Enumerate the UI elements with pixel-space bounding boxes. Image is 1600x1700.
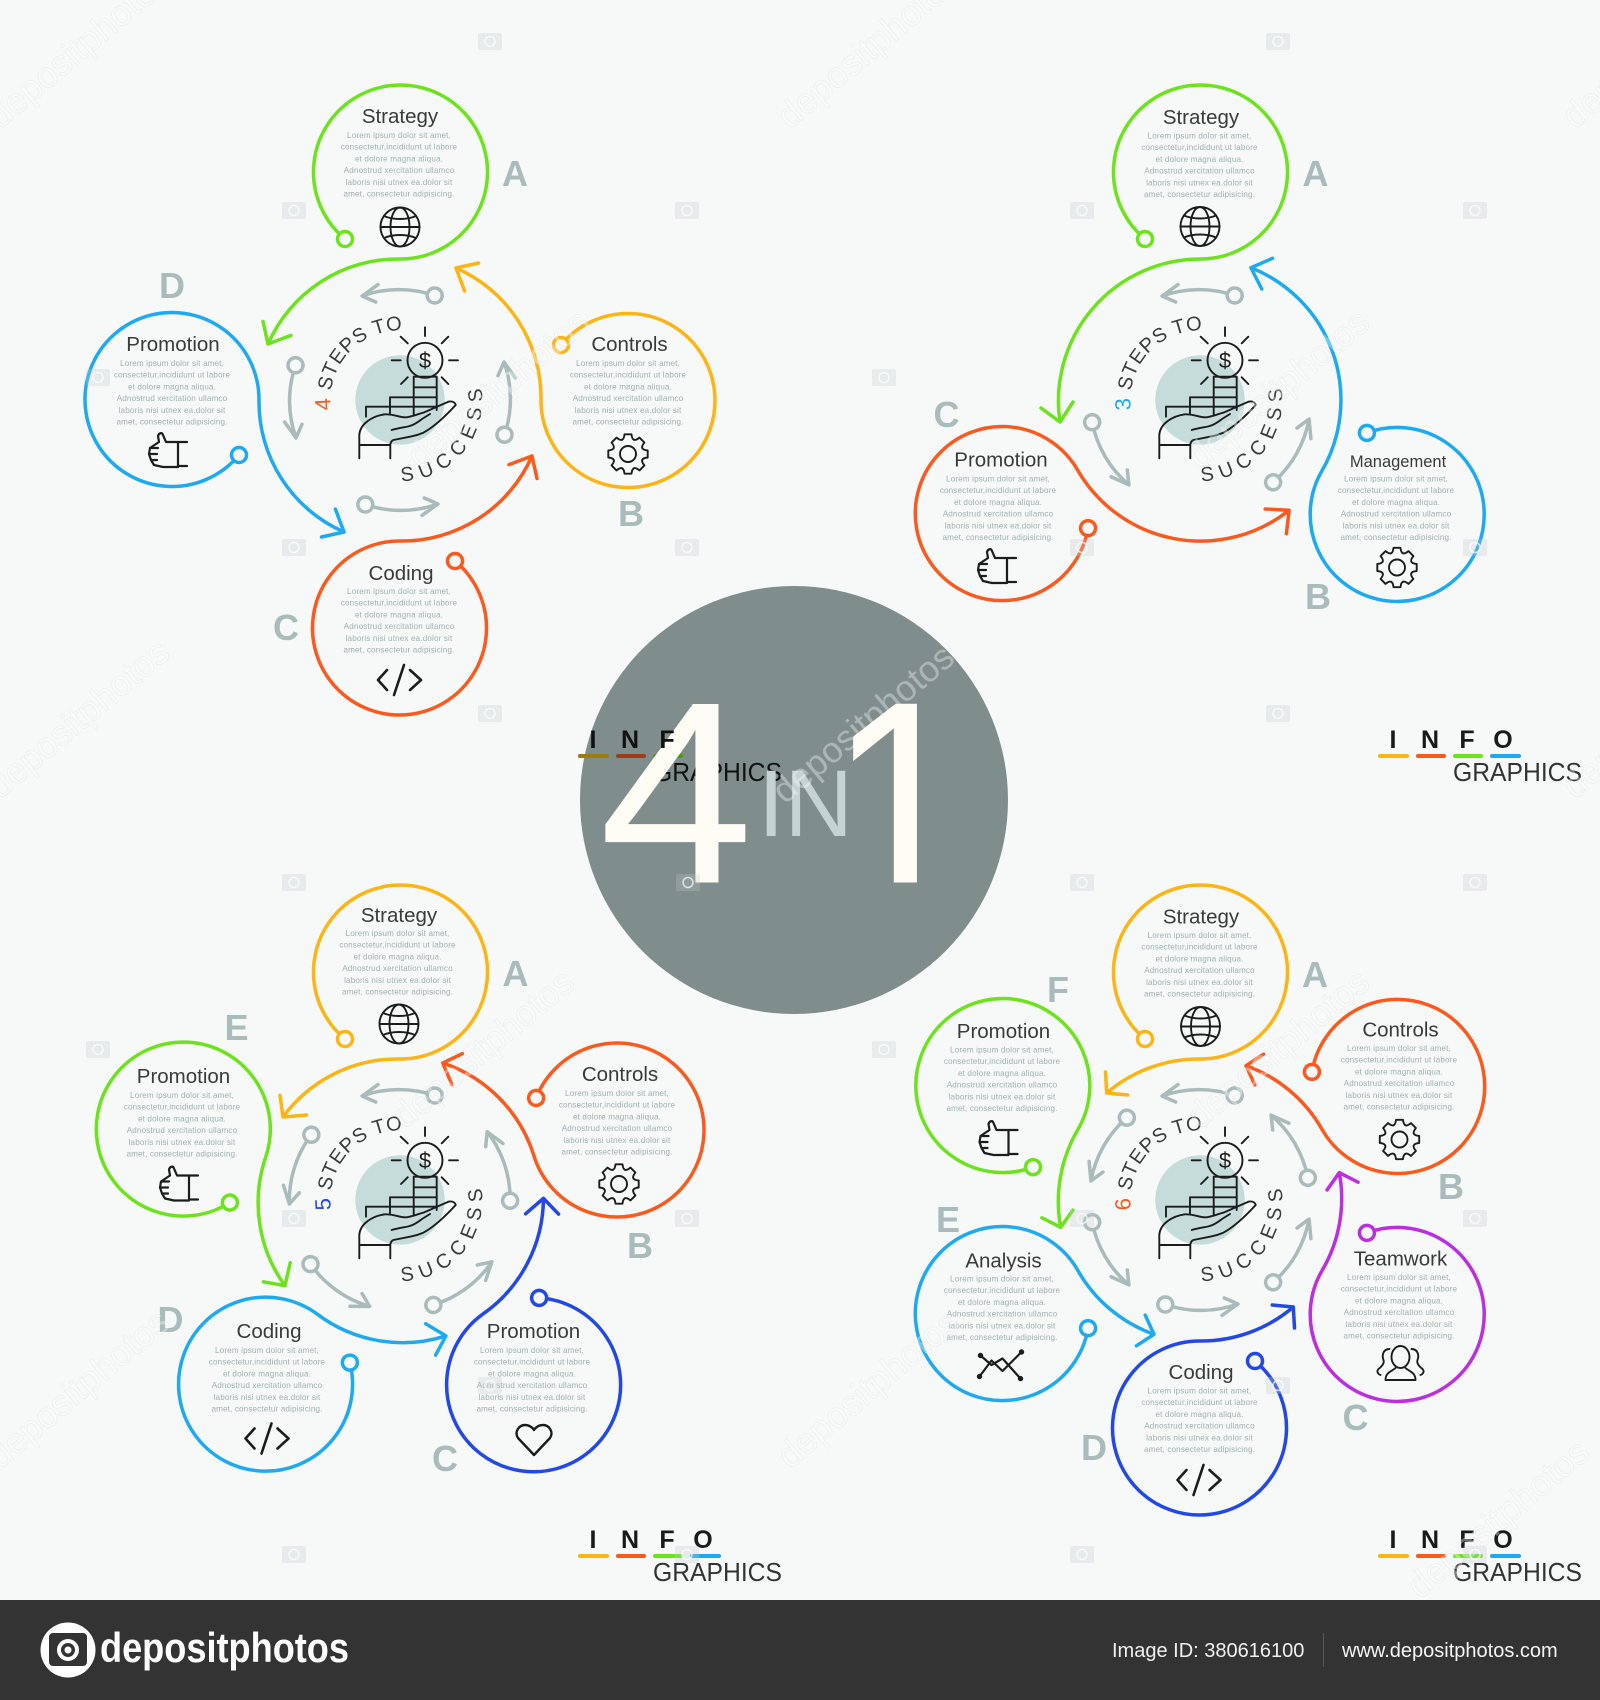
centre: arrows and hand icon xyxy=(1082,1082,1318,1318)
step C text: Lorem ipsum dolor sit amet, xyxy=(480,1346,584,1355)
connector C orange xyxy=(883,313,1299,695)
connector C purple xyxy=(1247,1171,1520,1433)
step F text: consectetur,incididunt ut labore xyxy=(944,1057,1061,1066)
letter B: B xyxy=(1438,1166,1464,1207)
step E text xyxy=(124,1065,241,1158)
step A text: amet, consectetur adipisicing. xyxy=(1144,990,1255,998)
step A text: Strategy xyxy=(361,904,438,927)
step A text: Adnostrud xercitation ullamco xyxy=(344,166,455,175)
connector B yellow xyxy=(456,263,715,487)
step B text: consectetur,incididunt ut labore xyxy=(1338,486,1455,495)
step E text: et dolore magna aliqua. xyxy=(138,1114,226,1123)
step B text xyxy=(570,333,687,426)
step D text: Lorem ipsum dolor sit amet, xyxy=(120,359,224,368)
logo underlay: bars and graphics under the 4: GRAPHICS xyxy=(653,757,782,787)
icon: gear xyxy=(599,1164,639,1204)
step A text: consectetur,incididunt ut labore xyxy=(341,143,458,152)
step B text: Adnostrud xercitation ullamco xyxy=(1344,1079,1455,1088)
step D text: Lorem ipsum dolor sit amet, xyxy=(1148,1386,1251,1396)
connector E light blue xyxy=(883,1177,1156,1439)
icon: team xyxy=(1377,1346,1424,1380)
panel: 4 steps to success xyxy=(83,83,717,726)
step A text xyxy=(339,904,456,996)
connector D light blue xyxy=(144,1216,448,1525)
stock watermarks: depositphotos xyxy=(399,301,597,476)
step D text: consectetur,incididunt ut labore xyxy=(114,371,231,380)
step E text: Adnostrud xercitation ullamco xyxy=(127,1126,238,1135)
letter D: D xyxy=(158,1299,184,1340)
centre: arrows and hand icon xyxy=(282,1082,520,1314)
logo: info graphics top right: N xyxy=(1421,726,1439,754)
logo: info graphics bottom left: F xyxy=(659,1526,675,1554)
step A text: consectetur,incididunt ut labore xyxy=(339,941,456,950)
step C text: Coding xyxy=(369,562,433,585)
step D text: laboris nisi utnex ea.dolor sit xyxy=(1146,1433,1253,1442)
step C text: Adnostrud xercitation ullamco xyxy=(943,510,1054,519)
step D text: et dolore magna aliqua. xyxy=(128,382,216,391)
brand wordmark: depositphotos xyxy=(100,1624,349,1671)
logo: info graphics bottom left: GRAPHICS xyxy=(653,1557,782,1587)
connector D blue xyxy=(85,313,344,537)
step E text: laboris nisi utnex ea.dolor sit xyxy=(129,1138,236,1147)
step C text: consectetur,incididunt ut labore xyxy=(474,1358,591,1367)
logo: info graphics bottom left: N xyxy=(621,1526,639,1554)
step A text: consectetur,incididunt ut labore xyxy=(1141,143,1258,152)
step A text xyxy=(1141,106,1258,199)
connector A green xyxy=(263,85,487,344)
step C text: Lorem ipsum dolor sit amet, xyxy=(347,587,451,596)
connector B orange xyxy=(1244,961,1517,1223)
step D text: Adnostrud xercitation ullamco xyxy=(117,394,228,403)
step A text xyxy=(1141,906,1258,998)
step D text xyxy=(209,1320,326,1414)
step A text: amet, consectetur adipisicing. xyxy=(343,190,455,198)
connector A yellow xyxy=(1106,885,1287,1095)
step B text: Adnostrud xercitation ullamco xyxy=(562,1124,673,1133)
step C text: Promotion xyxy=(954,448,1048,472)
logo: info graphics bottom right: N xyxy=(1421,1526,1439,1554)
connector B orange xyxy=(442,989,727,1258)
step A text: amet, consectetur adipisicing. xyxy=(1144,190,1255,199)
step D text: amet, consectetur adipisicing. xyxy=(116,418,228,426)
word IN: IN xyxy=(758,751,853,857)
step D text: Adnostrud xercitation ullamco xyxy=(212,1381,323,1390)
centre: arrows and hand icon: $ xyxy=(419,348,431,373)
step B text: Controls xyxy=(582,1063,658,1086)
step A text: consectetur,incididunt ut labore xyxy=(1141,943,1258,952)
step D text: et dolore magna aliqua. xyxy=(1155,1410,1244,1419)
letter B: B xyxy=(618,493,644,534)
letter D: D xyxy=(159,265,185,306)
step C text: laboris nisi utnex ea.dolor sit xyxy=(945,521,1052,530)
grey disc xyxy=(580,586,1008,1014)
centre: arrows and hand icon xyxy=(1082,282,1313,492)
step D text: laboris nisi utnex ea.dolor sit xyxy=(214,1393,321,1402)
icon: thumb up xyxy=(978,549,1016,583)
step F text: et dolore magna aliqua. xyxy=(958,1069,1046,1078)
step B text: Lorem ipsum dolor sit amet, xyxy=(1347,1044,1451,1053)
step E text: Lorem ipsum dolor sit amet, xyxy=(950,1274,1054,1284)
letter C: C xyxy=(1342,1397,1368,1438)
icon: code xyxy=(246,1424,288,1454)
step B text: Adnostrud xercitation ullamco xyxy=(1341,510,1452,519)
logo: info graphics top right: O xyxy=(1493,726,1513,754)
step D text: et dolore magna aliqua. xyxy=(223,1369,311,1378)
stock watermarks: depositphotos xyxy=(1179,301,1377,476)
step C text: Lorem ipsum dolor sit amet, xyxy=(946,474,1050,484)
logo letters I N F: I xyxy=(590,726,596,754)
step C text xyxy=(940,448,1057,542)
step B text: laboris nisi utnex ea.dolor sit xyxy=(564,1136,671,1145)
step E text: consectetur,incididunt ut labore xyxy=(944,1286,1061,1295)
step B text: laboris nisi utnex ea.dolor sit xyxy=(1343,521,1450,530)
step D text: Promotion xyxy=(126,333,220,356)
step A text: Strategy xyxy=(1163,106,1240,129)
step E text: amet, consectetur adipisicing. xyxy=(126,1150,238,1158)
letter C: C xyxy=(934,394,960,435)
connector A green xyxy=(1041,85,1287,422)
step E text: amet, consectetur adipisicing. xyxy=(946,1333,1058,1342)
panel: 5 steps to success xyxy=(94,883,706,1479)
image id: Image ID: 380616100 xyxy=(1112,1640,1304,1662)
connector B blue xyxy=(1137,251,1552,633)
step D text: Adnostrud xercitation ullamco xyxy=(1144,1422,1255,1431)
logo: info graphics bottom left xyxy=(578,1526,782,1587)
step B text: Lorem ipsum dolor sit amet, xyxy=(565,1089,669,1098)
letter E: E xyxy=(224,1007,249,1048)
step C text xyxy=(341,562,458,654)
letter A: A xyxy=(1302,153,1328,194)
icon: globe xyxy=(380,208,420,246)
letter A: A xyxy=(1302,954,1328,995)
logo: info graphics top right: GRAPHICS xyxy=(1453,757,1582,787)
step E text: Lorem ipsum dolor sit amet, xyxy=(130,1091,234,1100)
step F text: Adnostrud xercitation ullamco xyxy=(947,1081,1058,1090)
letter F: F xyxy=(1047,969,1069,1010)
letter B: B xyxy=(627,1225,653,1266)
step F text: amet, consectetur adipisicing. xyxy=(946,1104,1058,1113)
icon: globe xyxy=(1181,1007,1220,1046)
logo: info graphics bottom right xyxy=(1378,1526,1582,1587)
step A text: Strategy xyxy=(1163,906,1240,928)
icon: thumb up xyxy=(149,433,187,467)
step C text: Teamwork xyxy=(1354,1248,1448,1270)
step F text: laboris nisi utnex ea.dolor sit xyxy=(949,1092,1056,1101)
step E text: consectetur,incididunt ut labore xyxy=(124,1103,241,1112)
step B text: Lorem ipsum dolor sit amet, xyxy=(576,359,680,368)
stock watermarks: depositphotos xyxy=(764,636,962,811)
step C text: et dolore magna aliqua. xyxy=(1355,1296,1443,1305)
logo: info graphics bottom right: F xyxy=(1459,1526,1475,1554)
footer bar xyxy=(0,1600,1600,1700)
icon: gear xyxy=(1380,1120,1419,1159)
step B text xyxy=(1338,453,1455,542)
step E text: Adnostrud xercitation ullamco xyxy=(947,1310,1058,1319)
centre: arrows and hand icon: SUCCESS xyxy=(402,389,482,482)
connector F green xyxy=(880,967,1153,1229)
step A text: Strategy xyxy=(362,105,439,128)
logo: info graphics bottom left: O xyxy=(693,1526,713,1554)
step C text: laboris nisi utnex ea.dolor sit xyxy=(479,1393,586,1402)
step C text: Lorem ipsum dolor sit amet, xyxy=(1347,1273,1451,1282)
step D text: laboris nisi utnex ea.dolor sit xyxy=(119,406,226,415)
logo: info graphics bottom right: O xyxy=(1493,1526,1513,1554)
panel: 6 steps to success xyxy=(884,883,1486,1517)
big number 4: 4 xyxy=(599,648,753,938)
step C text: et dolore magna aliqua. xyxy=(355,610,443,619)
centre: arrows and hand icon: SUCCESS xyxy=(402,1189,482,1282)
step A text: Lorem ipsum dolor sit amet, xyxy=(347,131,451,140)
logo letters I N F: N xyxy=(621,726,639,754)
step A text: laboris nisi utnex ea.dolor sit xyxy=(346,178,453,187)
step A text: laboris nisi utnex ea.dolor sit xyxy=(1146,178,1253,187)
step B text: Controls xyxy=(1362,1018,1439,1042)
centre: arrows and hand icon: 5 STEPS TO xyxy=(315,1116,401,1210)
step C text: amet, consectetur adipisicing. xyxy=(1343,1332,1455,1340)
step F text: Lorem ipsum dolor sit amet, xyxy=(950,1046,1054,1054)
step A text: Adnostrud xercitation ullamco xyxy=(1144,966,1255,975)
stock watermarks: depositphotos xyxy=(1399,1431,1597,1606)
step D text: amet, consectetur adipisicing. xyxy=(211,1404,323,1414)
step C text xyxy=(1341,1248,1458,1340)
step C text: amet, consectetur adipisicing. xyxy=(343,646,455,654)
step B text: consectetur,incididunt ut labore xyxy=(570,371,687,380)
centre: arrows and hand icon: SUCCESS xyxy=(1202,389,1282,482)
logo: info graphics bottom right: GRAPHICS xyxy=(1453,1557,1582,1587)
step B text: Management xyxy=(1350,453,1447,471)
step B text xyxy=(559,1063,676,1156)
logo: info graphics top right xyxy=(1378,726,1582,787)
icon: thumb up xyxy=(980,1121,1018,1155)
icon: chart xyxy=(978,1350,1023,1380)
step B text: et dolore magna aliqua. xyxy=(584,382,672,391)
centre: arrows and hand icon: 3 STEPS TO xyxy=(1115,316,1201,410)
icon: code xyxy=(1178,1465,1220,1495)
step D text: Coding xyxy=(1169,1361,1233,1384)
step D text: amet, consectetur adipisicing. xyxy=(1144,1445,1255,1454)
icon: thumb up xyxy=(160,1167,198,1200)
step C text: consectetur,incididunt ut labore xyxy=(1341,1285,1458,1294)
step B text: et dolore magna aliqua. xyxy=(573,1112,661,1121)
centre: arrows and hand icon: $ xyxy=(1219,1148,1231,1173)
connector C orange xyxy=(313,456,537,715)
step D text: consectetur,incididunt ut labore xyxy=(1141,1398,1258,1407)
step B text: amet, consectetur adipisicing. xyxy=(572,418,684,426)
icon: gear xyxy=(1377,548,1417,587)
logo: info graphics bottom left: I xyxy=(590,1526,596,1554)
step B text: Adnostrud xercitation ullamco xyxy=(573,394,684,403)
step B text: amet, consectetur adipisicing. xyxy=(1340,533,1452,542)
letter C: C xyxy=(432,1438,458,1479)
step A text: et dolore magna aliqua. xyxy=(1155,155,1244,164)
step A text: et dolore magna aliqua. xyxy=(353,952,442,961)
step B text: laboris nisi utnex ea.dolor sit xyxy=(575,406,682,415)
logo underlay: bars and graphics under the 4 xyxy=(578,754,782,787)
icon: globe xyxy=(1180,207,1220,246)
step C text: Adnostrud xercitation ullamco xyxy=(477,1381,588,1390)
letter A: A xyxy=(502,153,528,194)
step A text: Lorem ipsum dolor sit amet, xyxy=(1148,132,1251,140)
step A text: Adnostrud xercitation ullamco xyxy=(342,964,453,973)
icon: depositphotos camera logo xyxy=(40,1622,96,1678)
step D text xyxy=(1141,1361,1258,1454)
connector D deep blue xyxy=(1113,1305,1294,1515)
logo letters I N F: F xyxy=(659,726,675,754)
connector C deep blue xyxy=(378,1197,682,1506)
step F text xyxy=(944,1020,1061,1113)
step C text: laboris nisi utnex ea.dolor sit xyxy=(1346,1320,1453,1329)
icon: gear xyxy=(608,434,648,474)
step C text: et dolore magna aliqua. xyxy=(488,1369,576,1378)
step A text: et dolore magna aliqua. xyxy=(355,154,443,163)
step B text: amet, consectetur adipisicing. xyxy=(1343,1102,1455,1112)
step B text xyxy=(1341,1018,1458,1112)
step B text: Lorem ipsum dolor sit amet, xyxy=(1344,474,1448,484)
centre: arrows and hand icon xyxy=(282,282,518,518)
central badge: 4 in 1 xyxy=(578,586,1008,1014)
step F text: Promotion xyxy=(957,1020,1050,1043)
step C text: Adnostrud xercitation ullamco xyxy=(1344,1308,1455,1317)
step B text: et dolore magna aliqua. xyxy=(1355,1067,1443,1076)
step C text: consectetur,incididunt ut labore xyxy=(341,599,458,608)
stock watermarks: depositphotos xyxy=(384,961,582,1136)
step C text: amet, consectetur adipisicing. xyxy=(476,1404,588,1414)
step B text: et dolore magna aliqua. xyxy=(1352,498,1440,507)
stock watermarks: depositphotos xyxy=(1179,961,1377,1136)
step C text xyxy=(474,1320,591,1414)
step C text: Promotion xyxy=(487,1320,580,1343)
step B text: Controls xyxy=(591,333,668,356)
step A text: Lorem ipsum dolor sit amet, xyxy=(1148,931,1251,940)
step A text: laboris nisi utnex ea.dolor sit xyxy=(1146,978,1253,987)
centre: arrows and hand icon: $ xyxy=(419,1148,431,1173)
letter C: C xyxy=(273,607,299,648)
step B text: amet, consectetur adipisicing. xyxy=(561,1148,673,1156)
step D text xyxy=(114,333,231,426)
letter A: A xyxy=(502,953,528,994)
connector A yellow xyxy=(280,885,487,1117)
step B text: consectetur,incididunt ut labore xyxy=(559,1101,676,1110)
step D text: Lorem ipsum dolor sit amet, xyxy=(215,1346,319,1355)
panel: 3 steps to success xyxy=(914,83,1486,617)
letter D: D xyxy=(1081,1427,1107,1468)
centre: arrows and hand icon: SUCCESS xyxy=(1202,1189,1282,1282)
icon: heart xyxy=(517,1425,551,1455)
step D text: Coding xyxy=(237,1320,301,1343)
step A text: Lorem ipsum dolor sit amet, xyxy=(346,929,449,938)
step C text: consectetur,incididunt ut labore xyxy=(940,486,1057,495)
logo: info graphics top right: F xyxy=(1459,726,1475,754)
big number 1: 1 xyxy=(828,640,974,968)
stock watermarks: depositphotos xyxy=(769,1301,967,1476)
logo: info graphics bottom right: I xyxy=(1390,1526,1396,1554)
letter B: B xyxy=(1305,576,1331,617)
step E text: Analysis xyxy=(965,1250,1042,1272)
step A text: Adnostrud xercitation ullamco xyxy=(1144,167,1255,176)
step D text: consectetur,incididunt ut labore xyxy=(209,1358,326,1367)
centre: arrows and hand icon: 4 STEPS TO xyxy=(315,316,401,410)
separator xyxy=(1323,1633,1324,1667)
step C text: laboris nisi utnex ea.dolor sit xyxy=(346,634,453,643)
step A text xyxy=(341,105,458,198)
step A text: amet, consectetur adipisicing. xyxy=(342,988,453,996)
step C text: amet, consectetur adipisicing. xyxy=(942,533,1054,542)
icon: code xyxy=(378,665,421,695)
centre: arrows and hand icon: $ xyxy=(1219,348,1231,373)
connector E green xyxy=(63,1019,348,1288)
site url: www.depositphotos.com xyxy=(1341,1640,1558,1662)
step B text: laboris nisi utnex ea.dolor sit xyxy=(1346,1091,1453,1100)
icon: globe xyxy=(380,1004,418,1044)
step E text: et dolore magna aliqua. xyxy=(958,1298,1046,1307)
step A text: et dolore magna aliqua. xyxy=(1155,954,1244,963)
step C text: et dolore magna aliqua. xyxy=(954,498,1042,507)
letter E: E xyxy=(936,1199,960,1240)
logo letters I N F xyxy=(590,726,675,754)
step C text: Adnostrud xercitation ullamco xyxy=(344,622,455,631)
step A text: laboris nisi utnex ea.dolor sit xyxy=(344,976,451,985)
logo: info graphics top right: I xyxy=(1390,726,1396,754)
step E text: Promotion xyxy=(137,1065,230,1088)
step B text: consectetur,incididunt ut labore xyxy=(1341,1056,1458,1065)
step E text xyxy=(944,1250,1061,1342)
centre: arrows and hand icon: 6 STEPS TO xyxy=(1115,1116,1201,1210)
step E text: laboris nisi utnex ea.dolor sit xyxy=(949,1321,1056,1330)
